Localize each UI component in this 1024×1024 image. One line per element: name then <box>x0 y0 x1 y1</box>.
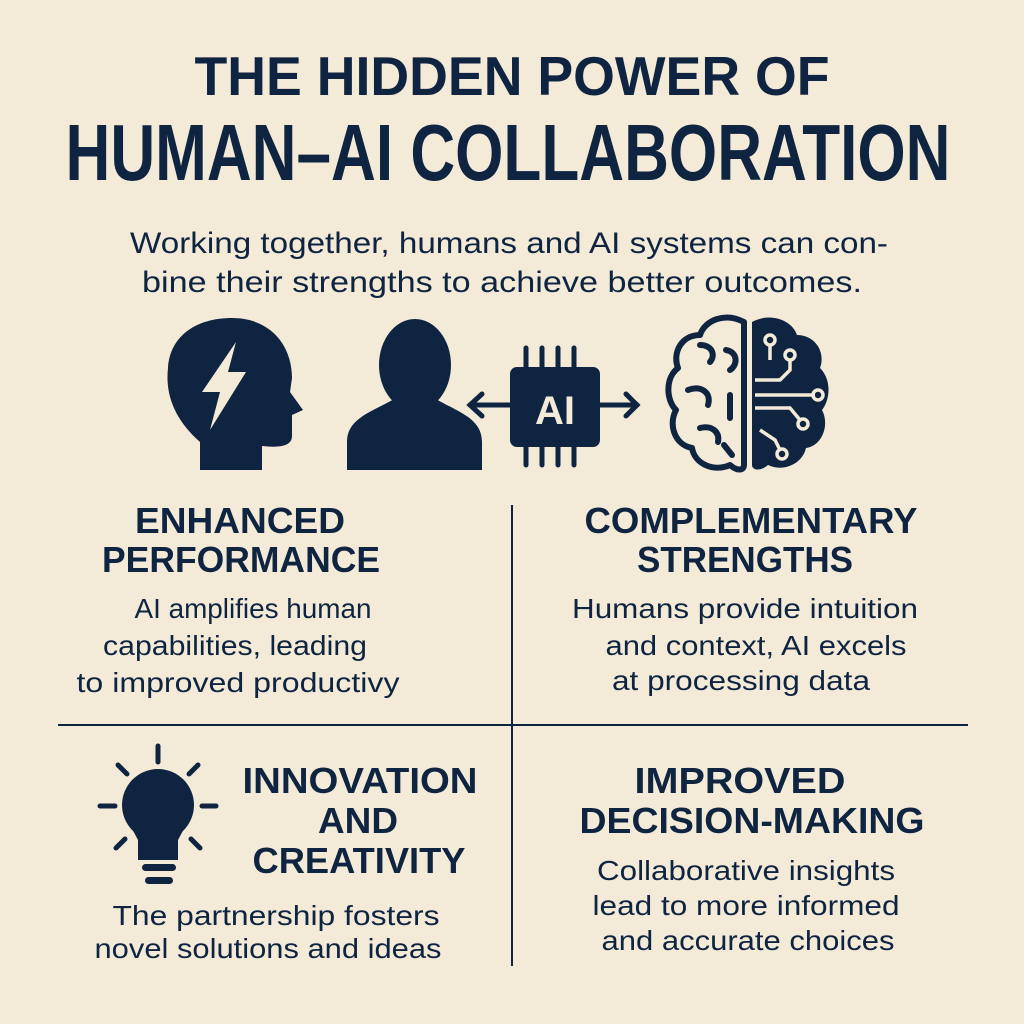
panel: enhanced performance: PERFORMANCE <box>102 539 380 580</box>
panel: complementary strengths: COMPLEMENTARY <box>584 500 918 541</box>
subtitle: Working together, humans and AI systems can con- <box>130 227 888 260</box>
panel: complementary strengths: Humans provide intuition <box>572 593 918 624</box>
panel: complementary strengths: STRENGTHS <box>637 539 853 580</box>
panel: enhanced performance: capabilities, leading <box>103 630 367 661</box>
panel: complementary strengths: and context, AI excels <box>606 630 906 661</box>
icon: light bulb <box>100 746 216 884</box>
panel: improved decision-making: Collaborative insights <box>597 855 895 886</box>
panel: improved decision-making: IMPROVED <box>634 760 846 801</box>
panel: improved decision-making: DECISION-MAKING <box>580 800 924 841</box>
panel: enhanced performance <box>76 500 400 698</box>
panel: complementary strengths <box>572 500 918 696</box>
panel: innovation and creativity: AND <box>318 800 398 841</box>
subtitle <box>130 227 888 299</box>
icon: brain circuit <box>668 318 828 470</box>
panel: innovation and creativity: The partnership fosters <box>112 900 440 931</box>
icon: AI chip with arrows: AI <box>535 389 575 433</box>
icon: person <box>347 319 482 470</box>
icon: AI chip with arrows <box>470 348 637 465</box>
panel: improved decision-making: lead to more informed <box>592 890 900 921</box>
dividers <box>58 505 968 966</box>
title <box>66 45 950 197</box>
panel: innovation and creativity <box>94 746 478 964</box>
panel: innovation and creativity: CREATIVITY <box>252 840 466 881</box>
panel: enhanced performance: AI amplifies human <box>134 593 372 624</box>
title: THE HIDDEN POWER OF <box>194 45 830 107</box>
panel: innovation and creativity: novel solutions and ideas <box>94 933 442 964</box>
panel: improved decision-making: and accurate choices <box>602 925 894 956</box>
panel: innovation and creativity: INNOVATION <box>242 760 478 801</box>
panel: complementary strengths: at processing data <box>612 665 870 696</box>
subtitle: bine their strengths to achieve better outcomes. <box>142 266 862 299</box>
panel: enhanced performance: ENHANCED <box>135 500 345 541</box>
panel: enhanced performance: to improved productivy <box>76 667 400 698</box>
panel: improved decision-making <box>580 760 924 956</box>
icon: head with lightning <box>167 318 303 470</box>
